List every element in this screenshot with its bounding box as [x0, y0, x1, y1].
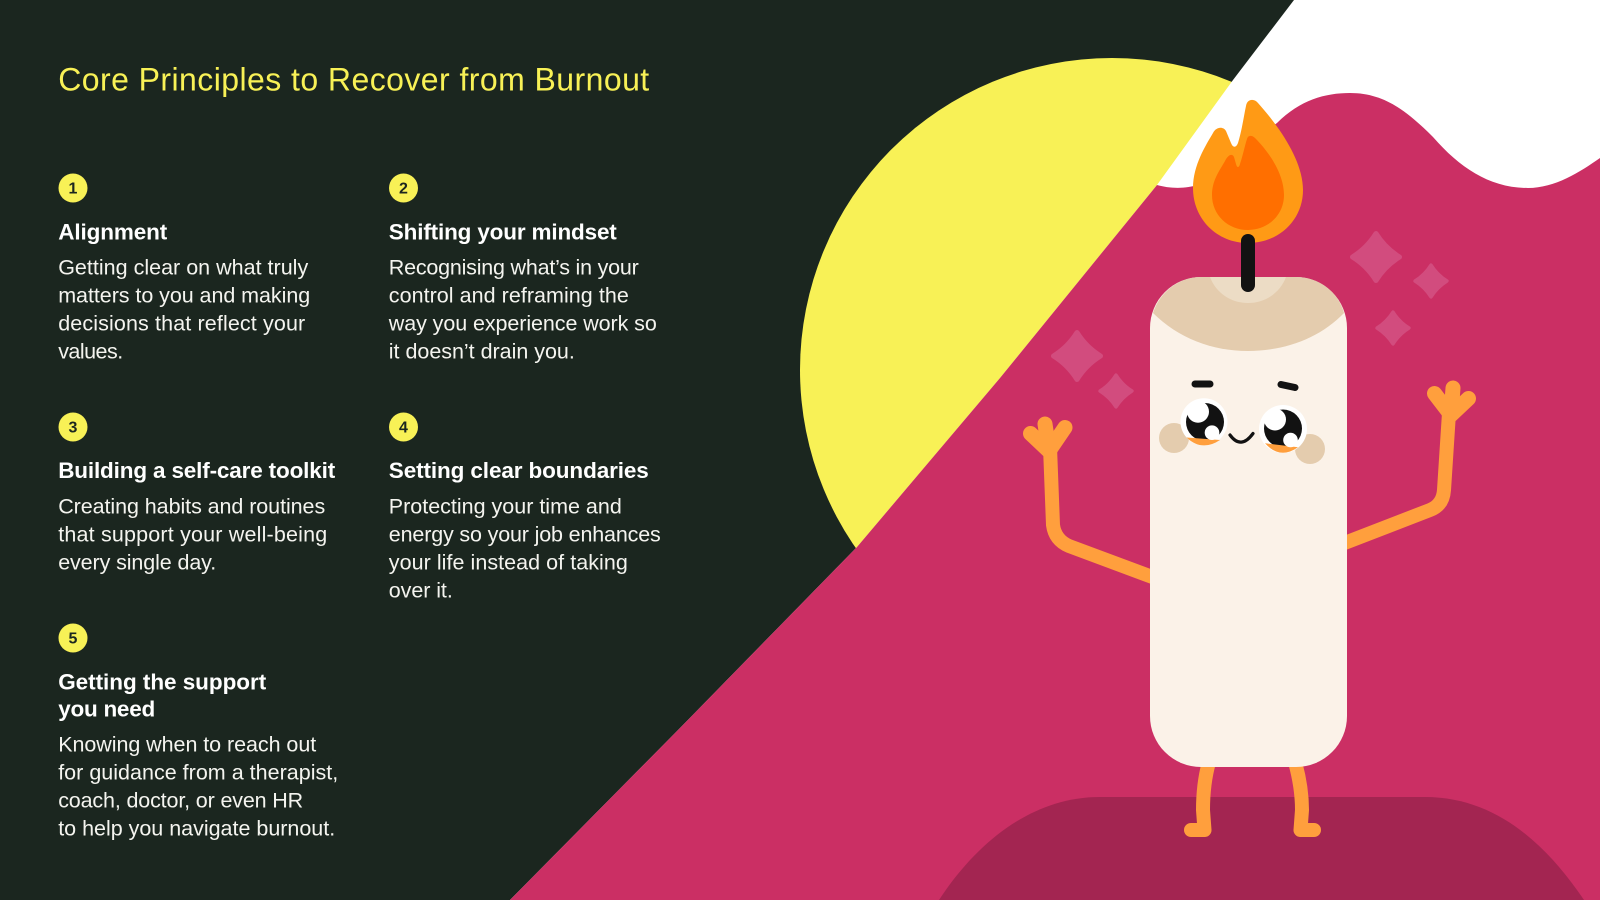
- cheeks: [1159, 423, 1325, 464]
- flame inner: [1212, 136, 1284, 230]
- pink wave panel: [510, 93, 1600, 900]
- wax pool: [1210, 277, 1286, 303]
- heading 5: Getting the support: [58, 670, 267, 694]
- number badge 4: [389, 412, 418, 442]
- body 3: [58, 494, 327, 574]
- body 2: [388, 256, 657, 364]
- body 1: [58, 256, 310, 364]
- body 1: matters to you and making: [58, 284, 310, 308]
- left arm: [1030, 424, 1155, 578]
- sparkles: [1054, 234, 1447, 407]
- body 1: Getting clear on what truly: [58, 256, 308, 280]
- item 3: self-care toolkit: [58, 412, 336, 574]
- body 4: your life instead of taking: [389, 550, 628, 574]
- item 5: getting support: [58, 624, 338, 840]
- number badge 1: 1: [69, 180, 78, 198]
- body 4: over it.: [389, 578, 453, 602]
- number badge 3: [58, 412, 88, 442]
- number badge 5: 5: [69, 630, 78, 648]
- right arm: [1342, 388, 1468, 544]
- flame outer: [1193, 100, 1303, 243]
- body 2: it doesn’t drain you.: [389, 340, 575, 364]
- number badge 1: [58, 174, 88, 202]
- body 5: to help you navigate burnout.: [58, 816, 335, 840]
- body 3: every single day.: [58, 550, 216, 574]
- body 1: values.: [58, 340, 123, 364]
- title: Core Principles to Recover from Burnout: [58, 62, 649, 98]
- body 1: decisions that reflect your: [58, 312, 305, 336]
- body 3: Creating habits and routines: [58, 494, 325, 518]
- heading 2: Shifting your mindset: [389, 219, 617, 244]
- white diagonal panel: [510, 0, 1600, 900]
- left eye: [1180, 398, 1228, 445]
- heading 4: Setting clear boundaries: [389, 458, 649, 483]
- body 4: [389, 494, 661, 602]
- body 3: that support your well-being: [58, 522, 327, 546]
- number badge 2: 2: [399, 180, 408, 198]
- body 5: [58, 732, 338, 840]
- body 2: way you experience work so: [388, 312, 657, 336]
- wick: [1241, 234, 1255, 292]
- smile: [1230, 434, 1253, 442]
- body 4: energy so your job enhances: [389, 522, 661, 546]
- body 4: Protecting your time and: [389, 494, 622, 518]
- body 2: Recognising what’s in your: [389, 256, 639, 280]
- item 4: clear boundaries: [389, 412, 661, 602]
- eyebrows: [1195, 384, 1295, 388]
- body 5: for guidance from a therapist,: [58, 760, 338, 784]
- body 5: coach, doctor, or even HR: [58, 788, 303, 812]
- number badge 4: 4: [399, 420, 408, 436]
- candle character: [1030, 100, 1468, 830]
- left leg: [1191, 762, 1209, 830]
- body 5: Knowing when to reach out: [58, 732, 316, 756]
- heading 5: [58, 670, 267, 722]
- number badge 3: 3: [69, 420, 78, 436]
- ground hill: [939, 797, 1584, 900]
- heading 3: Building a self-care toolkit: [58, 458, 336, 483]
- item 2: shifting your mindset: [388, 174, 657, 364]
- right leg: [1295, 762, 1314, 830]
- heading 5: you need: [58, 696, 155, 722]
- number badge 2: [389, 174, 418, 202]
- body 2: control and reframing the: [389, 284, 629, 308]
- yellow sun circle: [800, 58, 1424, 682]
- candle body: [1150, 277, 1347, 767]
- item 1: alignment: [58, 174, 310, 364]
- right eye: [1259, 405, 1307, 453]
- melted wax top: [1153, 277, 1344, 351]
- number badge 5: [58, 624, 88, 652]
- heading 1: Alignment: [58, 219, 168, 244]
